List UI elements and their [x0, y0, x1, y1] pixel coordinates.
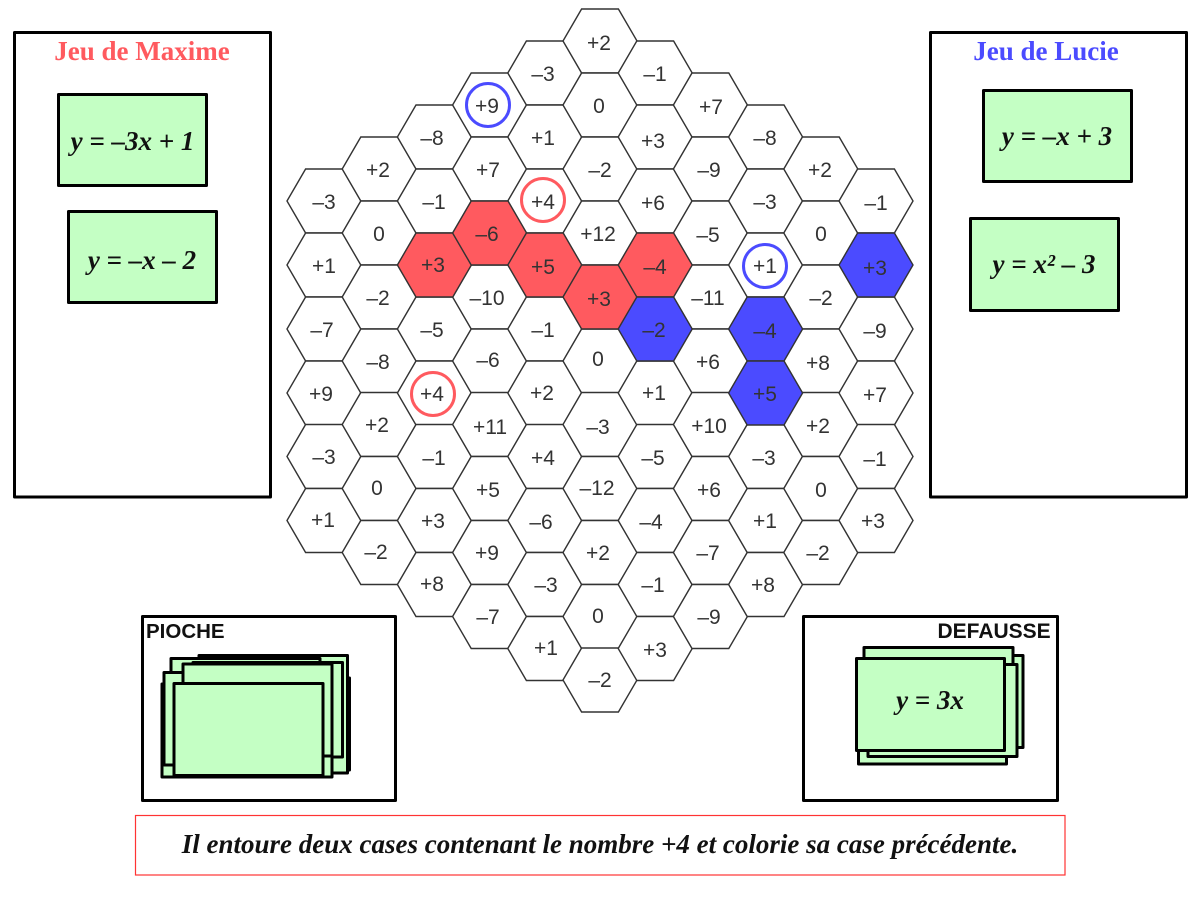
- card: y = -x - 2: [68, 212, 216, 302]
- hex column 1: [287, 169, 361, 552]
- stack of discarded cards: [856, 648, 1023, 764]
- hex column 1: –7: [310, 319, 334, 342]
- panel: Jeu de Lucie: [930, 32, 1186, 497]
- blue cells: Lucie's path: +3: [863, 257, 887, 280]
- red cells: Maxime's path: +3: [421, 254, 445, 277]
- hex column 2: +2: [365, 414, 389, 437]
- circled cell: red +4 bottom: [412, 372, 454, 416]
- card: y = -3x + 1: [58, 94, 206, 186]
- circled cell: blue +1: [744, 244, 786, 288]
- hex column 6: +12: [580, 223, 616, 246]
- hex column 8: +6: [696, 351, 720, 374]
- hex column 11: –1: [863, 448, 887, 471]
- hex column 9: +8: [751, 574, 775, 597]
- hex column 2: 0: [373, 223, 385, 246]
- hex column 5: –1: [531, 319, 555, 342]
- red cells: Maxime's path: –6: [475, 223, 499, 246]
- panel: DEFAUSSE discard pile: [804, 616, 1058, 800]
- hex column 9: –8: [753, 127, 777, 150]
- hex column 8: +10: [691, 415, 727, 438]
- hex column 11: –9: [863, 320, 887, 343]
- hex column 5: +4: [531, 447, 555, 470]
- hex column 2: +2: [366, 159, 390, 182]
- blue cells: Lucie's path: –4: [753, 320, 777, 343]
- hex column 5: +2: [530, 382, 554, 405]
- heading: Jeu de Lucie: Jeu de Lucie: [973, 36, 1119, 66]
- hex column 10: +2: [808, 159, 832, 182]
- hex column 1: –3: [312, 446, 336, 469]
- stack of blank cards: [162, 656, 350, 777]
- red cells: Maxime's path: +5: [531, 256, 555, 279]
- hex column 8: –9: [697, 606, 721, 629]
- circled cell: blue +1: +1: [753, 255, 777, 278]
- card: y = -x - 2: y = –x – 2: [85, 245, 196, 275]
- hex column 9: –3: [753, 191, 777, 214]
- hex column 3: +8: [420, 573, 444, 596]
- card: y = -x + 3: y = –x + 3: [999, 121, 1112, 151]
- hex column 2: –2: [364, 541, 388, 564]
- hex column 1: +1: [312, 255, 336, 278]
- hex column 4: +11: [473, 416, 507, 439]
- hex column 5: –6: [529, 511, 553, 534]
- hex column 11: +7: [863, 384, 887, 407]
- hex column 10: +8: [806, 352, 830, 375]
- label: DEFAUSSE: DEFAUSSE: [938, 620, 1051, 643]
- blue cells: Lucie's path: +5: [753, 383, 777, 406]
- hex column 6: 0: [592, 348, 604, 371]
- hex column 5: –3: [531, 63, 555, 86]
- hex column 11: [839, 169, 913, 552]
- top card: y = 3x: [856, 658, 1004, 750]
- red cells: Maxime's path: +3: [587, 288, 611, 311]
- hex column 6: –3: [586, 416, 610, 439]
- circled cell: red +4 top: +4: [531, 191, 555, 214]
- hex column 8: +7: [699, 96, 723, 119]
- hex column 9: [729, 105, 803, 616]
- card: y = x² - 3: [970, 218, 1118, 310]
- hex column 6: +2: [586, 542, 610, 565]
- hex column 10: –2: [809, 287, 833, 310]
- hex column 5: –3: [534, 574, 558, 597]
- hex column 9: –3: [752, 447, 776, 470]
- hex column 7: +3: [643, 639, 667, 662]
- hex column 10: [784, 137, 858, 584]
- hex column 11: –1: [864, 192, 888, 215]
- red cells: Maxime's path: –4: [643, 256, 667, 279]
- hex column 3: [397, 105, 471, 616]
- hex column 7: –5: [641, 447, 665, 470]
- hex column 6: –2: [588, 669, 612, 692]
- hex column 5: [508, 41, 582, 680]
- card: y = -x + 3: [984, 90, 1132, 182]
- hex column 3: +3: [421, 510, 445, 533]
- hex column 10: +2: [806, 415, 830, 438]
- hex column 1: +9: [309, 383, 333, 406]
- top card: y = 3x: y = 3x: [893, 685, 964, 715]
- hex column 1: –3: [312, 191, 336, 214]
- hex column 8: –7: [696, 542, 720, 565]
- card: y = x² - 3: y = x² – 3: [990, 249, 1095, 279]
- hex column 4: –6: [476, 349, 500, 372]
- hex column 6: –12: [579, 477, 615, 500]
- circled cell: blue +9: [466, 84, 510, 126]
- label: PIOCHE: PIOCHE: [146, 620, 225, 643]
- hex column 8: +6: [697, 479, 721, 502]
- hex column 10: 0: [815, 223, 827, 246]
- hex column 4: +5: [476, 479, 500, 502]
- hex column 5: +1: [531, 127, 555, 150]
- hex column 6: 0: [593, 95, 605, 118]
- hex column 3: –1: [422, 191, 446, 214]
- hex column 6: [563, 9, 637, 712]
- hex column 8: [673, 73, 747, 648]
- hex column 6: –2: [588, 159, 612, 182]
- hex column 2: –8: [366, 351, 390, 374]
- hex column 3: –1: [422, 447, 446, 470]
- hex column 2: [342, 137, 416, 584]
- circled cell: blue +9: +9: [475, 95, 499, 118]
- hex column 9: +1: [753, 510, 777, 533]
- panel: PIOCHE draw pile: [142, 616, 396, 800]
- hex column 7: –4: [639, 511, 663, 534]
- hex column 4: –7: [476, 606, 500, 629]
- hex column 4: +7: [476, 159, 500, 182]
- hex column 6: +2: [587, 32, 611, 55]
- hex column 7: –1: [641, 574, 665, 597]
- hex column 5: +1: [534, 637, 558, 660]
- blue cells: Lucie's path: [618, 233, 913, 425]
- blue cells: Lucie's path: –2: [642, 319, 666, 342]
- hex column 3: –8: [420, 127, 444, 150]
- hex column 4: –10: [469, 287, 505, 310]
- hex column 8: –5: [696, 224, 720, 247]
- hex column 2: 0: [371, 477, 383, 500]
- caption: [136, 816, 1065, 875]
- hex column 6: 0: [592, 605, 604, 628]
- hexagonal number board: [287, 9, 913, 712]
- hex column 3: –5: [420, 319, 444, 342]
- caption: Il entoure deux cases contenant le nombre +4 et colorie sa case précédente.: [181, 829, 1018, 859]
- hex column 4: [453, 73, 527, 648]
- hex column 2: –2: [366, 287, 390, 310]
- hex column 10: –2: [806, 542, 830, 565]
- card: y = -3x + 1: y = –3x + 1: [68, 126, 194, 156]
- hex column 1: +1: [311, 509, 335, 532]
- hex column 11: +3: [861, 510, 885, 533]
- hex column 7: +1: [642, 382, 666, 405]
- heading: Jeu de Maxime: Jeu de Maxime: [54, 36, 230, 66]
- hex column 7: –1: [643, 63, 667, 86]
- hex column 7: [618, 41, 692, 680]
- hex column 8: –11: [691, 287, 725, 310]
- red cells: Maxime's path: [397, 201, 692, 329]
- hex column 10: 0: [815, 479, 827, 502]
- hex column 8: –9: [697, 159, 721, 182]
- hex column 7: +3: [641, 130, 665, 153]
- circled cell: red +4 bottom: +4: [420, 383, 444, 406]
- hex column 4: +9: [475, 542, 499, 565]
- panel: Jeu de Maxime: [14, 32, 270, 497]
- hex column 7: +6: [641, 192, 665, 215]
- circled cell: red +4 top: [522, 178, 564, 222]
